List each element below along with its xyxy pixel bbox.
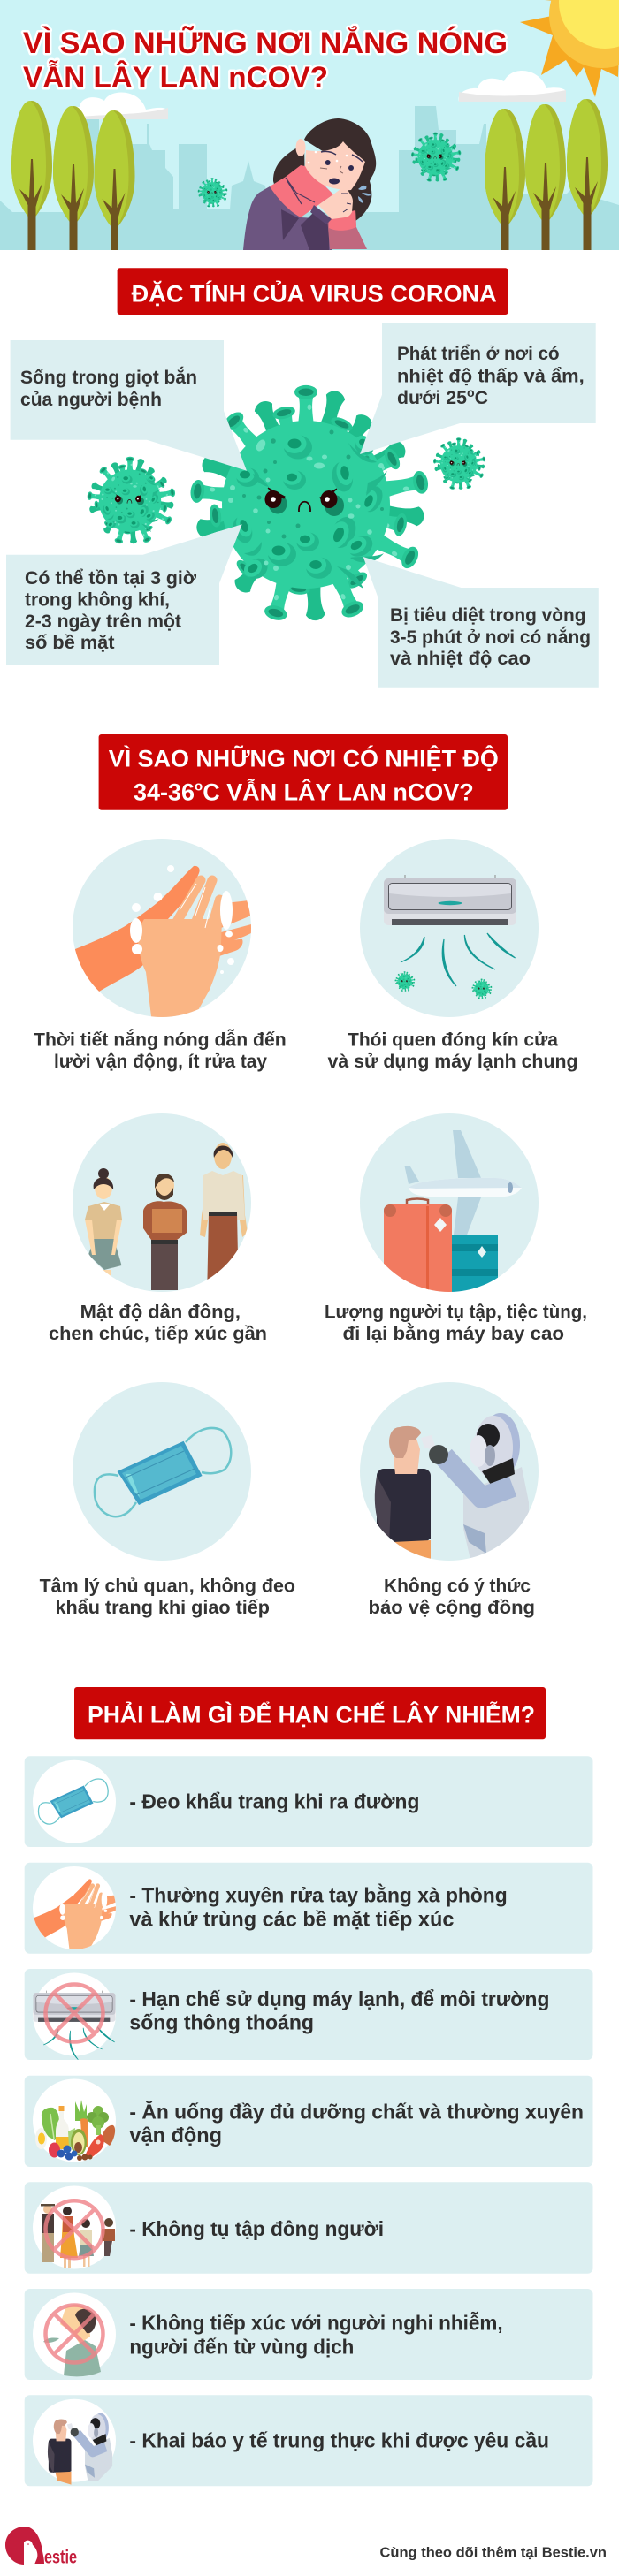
tip 7: honest health declaration: - Khai báo y tế trung thực khi được yêu cầu [129,2428,549,2451]
reason: crowded people [49,1113,267,1344]
sun [520,0,619,97]
callout: lives in droplets: Sống trong giọt bắn [20,367,197,388]
tip 6: avoid contact [25,2289,592,2380]
callout: grows at low temperature: Phát triển ở nơi có [397,344,560,364]
title: VẪN LÂY LAN nCOV? [23,59,328,95]
skyline [0,106,619,250]
reason: no community awareness: bảo vệ cộng đồng [368,1598,535,1618]
reason: air conditioner: và sử dụng máy lạnh chung [327,1052,578,1072]
reason: travel by plane [325,1113,587,1344]
main virus illustration [189,385,430,623]
cloud right [459,71,566,102]
tip 2: wash hands: - Thường xuyên rửa tay bằng xà phòng [129,1883,508,1907]
reason: travel by plane: đi lại bằng máy bay cao [343,1323,564,1344]
tip 4: nutrition [25,2076,592,2167]
trees [11,99,608,250]
banner: why spreading at 34-36C: VÌ SAO NHỮNG NƠI CÓ NHIỆT ĐỘ [109,746,499,772]
banner: virus characteristics: ĐẶC TÍNH CỦA VIRUS CORONA [132,281,497,308]
banner: why spreading at 34-36C [99,734,508,810]
callout: grows at low temperature [360,323,596,454]
reason: air conditioner [327,839,578,1072]
callout: survives 3 hours: số bề mặt [25,633,115,653]
cloud left [63,93,168,119]
callout: survives 3 hours: 2-3 ngày trên một [25,612,181,632]
callout: destroyed by heat: và nhiệt độ cao [390,649,531,669]
callout: survives 3 hours: trong không khí, [25,590,170,611]
header viruses [198,133,462,208]
reason: no mask: khẩu trang khi giao tiếp [55,1598,270,1618]
small virus left [87,457,176,544]
tip 3: limit air conditioning [25,1969,592,2060]
reason: crowded people: chen chúc, tiếp xúc gần [49,1324,267,1344]
callout: destroyed by heat: 3-5 phút ở nơi có nắng [390,627,591,648]
banner: virus characteristics [118,268,508,315]
footer text: Cùng theo dõi thêm tại Bestie.vn [380,2545,607,2560]
callout: survives 3 hours: Có thể tồn tại 3 giờ [25,568,196,589]
woman coughing [243,118,376,250]
callout: grows at low temperature: C [475,388,488,408]
reason: no mask [40,1382,295,1618]
reason: no community awareness [360,1382,539,1618]
logo: Bestie: estie [44,2548,77,2568]
small virus right [433,437,486,490]
tip 1: wear mask [25,1756,592,1847]
tip 3: limit air conditioning: sống thông thoáng [129,2011,314,2034]
banner: what to do [74,1687,546,1739]
callout: survives 3 hours [6,524,242,665]
reason: air conditioner: Thói quen đóng kín cửa [348,1030,558,1050]
tip 2: wash hands [25,1863,592,1954]
callout: lives in droplets [11,340,247,471]
banner: what to do: PHẢI LÀM GÌ ĐỂ HẠN CHẾ LÂY NHIỄM? [88,1701,535,1728]
tip 6: avoid contact: - Không tiếp xúc với người nghi nhiễm, [129,2311,503,2335]
header illustration [0,0,619,270]
logo: Bestie [5,2527,77,2568]
tip 4: nutrition: - Ăn uống đầy đủ dưỡng chất và thường xuyên [129,2099,584,2123]
reason: no mask: Tâm lý chủ quan, không đeo [40,1577,295,1597]
banner: why spreading at 34-36C: C VẪN LÂY LAN nCOV? [203,779,474,806]
callout: destroyed by heat: Bị tiêu diệt trong vòng [390,605,585,626]
callout: lives in droplets: của người bệnh [20,390,162,410]
reason: travel by plane: Lượng người tụ tập, tiệc tùng, [325,1303,587,1323]
tip 3: limit air conditioning: - Hạn chế sử dụng máy lạnh, để môi trường [129,1987,549,2010]
callout: grows at low temperature: o [467,385,475,399]
callout: destroyed by heat [363,557,599,688]
title [23,25,508,95]
reason: hand washing [34,839,287,1072]
callout: grows at low temperature: dưới 25 [397,388,466,408]
callout: grows at low temperature: nhiệt độ thấp và ẩm, [397,367,585,387]
tip 5: no gatherings [25,2182,592,2274]
reason: hand washing: Thời tiết nắng nóng dẫn đến [34,1029,287,1050]
banner: why spreading at 34-36C: o [195,779,203,794]
tip 7: honest health declaration [25,2395,592,2486]
tip 5: no gatherings: - Không tụ tập đông người [129,2217,384,2240]
tip 6: avoid contact: người đến từ vùng dịch [129,2335,354,2358]
reason: no community awareness: Không có ý thức [384,1577,531,1597]
tip 4: nutrition: vận động [129,2124,222,2147]
title: VÌ SAO NHỮNG NƠI NẮNG NÓNG [23,25,508,60]
tip 2: wash hands: và khử trùng các bề mặt tiếp xúc [129,1907,454,1930]
tip 1: wear mask: - Đeo khẩu trang khi ra đường [129,1790,419,1813]
reason: crowded people: Mật độ dân đông, [80,1303,241,1323]
reason: hand washing: lười vận động, ít rửa tay [54,1052,267,1072]
banner: why spreading at 34-36C: 34-36 [134,779,194,806]
